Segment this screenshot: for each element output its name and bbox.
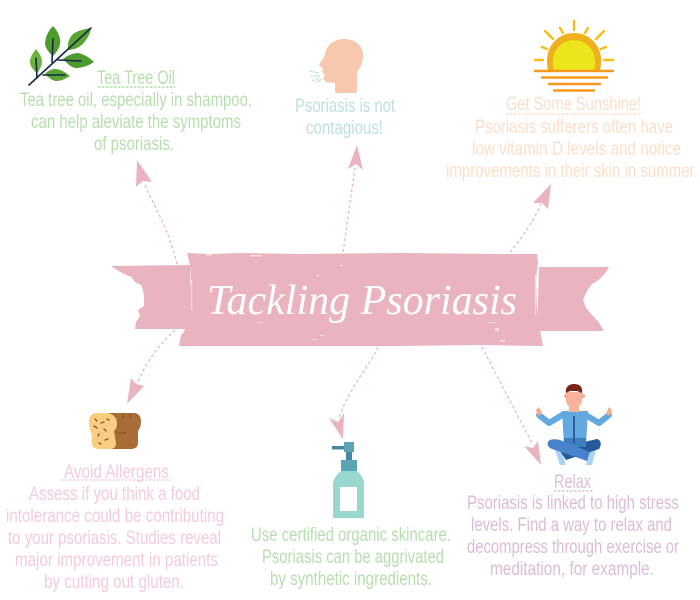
- heading: Relax: [554, 472, 591, 493]
- text block: allergens: by cutting out gluten.: [44, 572, 184, 593]
- text block: sunshine: [446, 94, 698, 182]
- text block: allergens: intolerance could be contributing: [6, 506, 224, 527]
- branch stem: [29, 28, 91, 85]
- torso: [562, 411, 588, 445]
- body: Tea tree oil, especially in shampoo,: [20, 90, 252, 111]
- icon: setting sun: [535, 21, 613, 90]
- arrow: to sunshine: [510, 184, 551, 252]
- text block: not contagious: [295, 96, 396, 139]
- text block: tea tree oil: [20, 68, 252, 155]
- text block: allergens: to your psoriasis. Studies reveal: [8, 528, 221, 549]
- text block: allergens: major improvement in patients: [15, 550, 218, 571]
- arrow: to allergens: [127, 330, 175, 404]
- text block: not contagious: Psoriasis is not: [295, 96, 396, 117]
- icon: bread loaf: [89, 413, 141, 449]
- front leg: [548, 439, 590, 461]
- bread seeds: [94, 414, 130, 444]
- breath lines: [309, 71, 322, 83]
- text block: not contagious: contagious!: [306, 118, 383, 139]
- horizon lines: [535, 71, 613, 90]
- sun disc: [547, 33, 601, 71]
- arrow: to tea tree oil: [136, 160, 177, 264]
- feet: [555, 450, 566, 465]
- arrow: to skincare: [329, 347, 378, 439]
- banner left tail: [111, 265, 191, 329]
- leaves: [45, 26, 60, 56]
- text block: skincare: Psoriasis can be aggrivated: [262, 547, 444, 568]
- text block: allergens: [6, 462, 224, 593]
- banner: title ribbon: [111, 253, 609, 346]
- arms: [539, 414, 609, 423]
- banner title: Tackling Psoriasis: [207, 278, 517, 324]
- pump: [332, 446, 345, 450]
- icon: head breathing: [309, 39, 363, 93]
- back leg: [558, 439, 601, 460]
- text block: skincare: by synthetic ingredients.: [270, 569, 432, 590]
- heading: Get Some Sunshine!: [506, 94, 641, 115]
- text block: tea tree oil: can help aleviate the symptoms: [31, 112, 241, 133]
- text block: tea tree oil: of psoriasis.: [94, 134, 174, 155]
- heading: Tea Tree Oil: [97, 68, 175, 89]
- heading: Avoid Allergens: [64, 462, 169, 483]
- icon: tea tree branch: [29, 26, 94, 85]
- bottle neck: [341, 460, 357, 471]
- arrow: to not contagious: [343, 145, 363, 252]
- bottle body: [333, 471, 364, 518]
- icon: meditating person: [536, 384, 612, 465]
- text block: relax: [467, 472, 680, 580]
- icon: lotion bottle: [332, 442, 364, 518]
- hair: [566, 384, 582, 393]
- body: Assess if you think a food: [29, 484, 200, 505]
- banner distress marks: [191, 254, 536, 342]
- bottle label: [340, 487, 357, 511]
- text block: skincare: Use certified organic skincare.: [251, 525, 451, 546]
- banner main panel: [179, 253, 543, 346]
- text block: skincare: [251, 525, 451, 590]
- text block: relax: meditation, for example.: [490, 559, 654, 580]
- neck and head: [569, 402, 579, 412]
- sun rays: [535, 21, 613, 60]
- hands: [536, 407, 542, 416]
- banner right tail: [537, 267, 609, 331]
- arrow: to relax: [482, 347, 541, 465]
